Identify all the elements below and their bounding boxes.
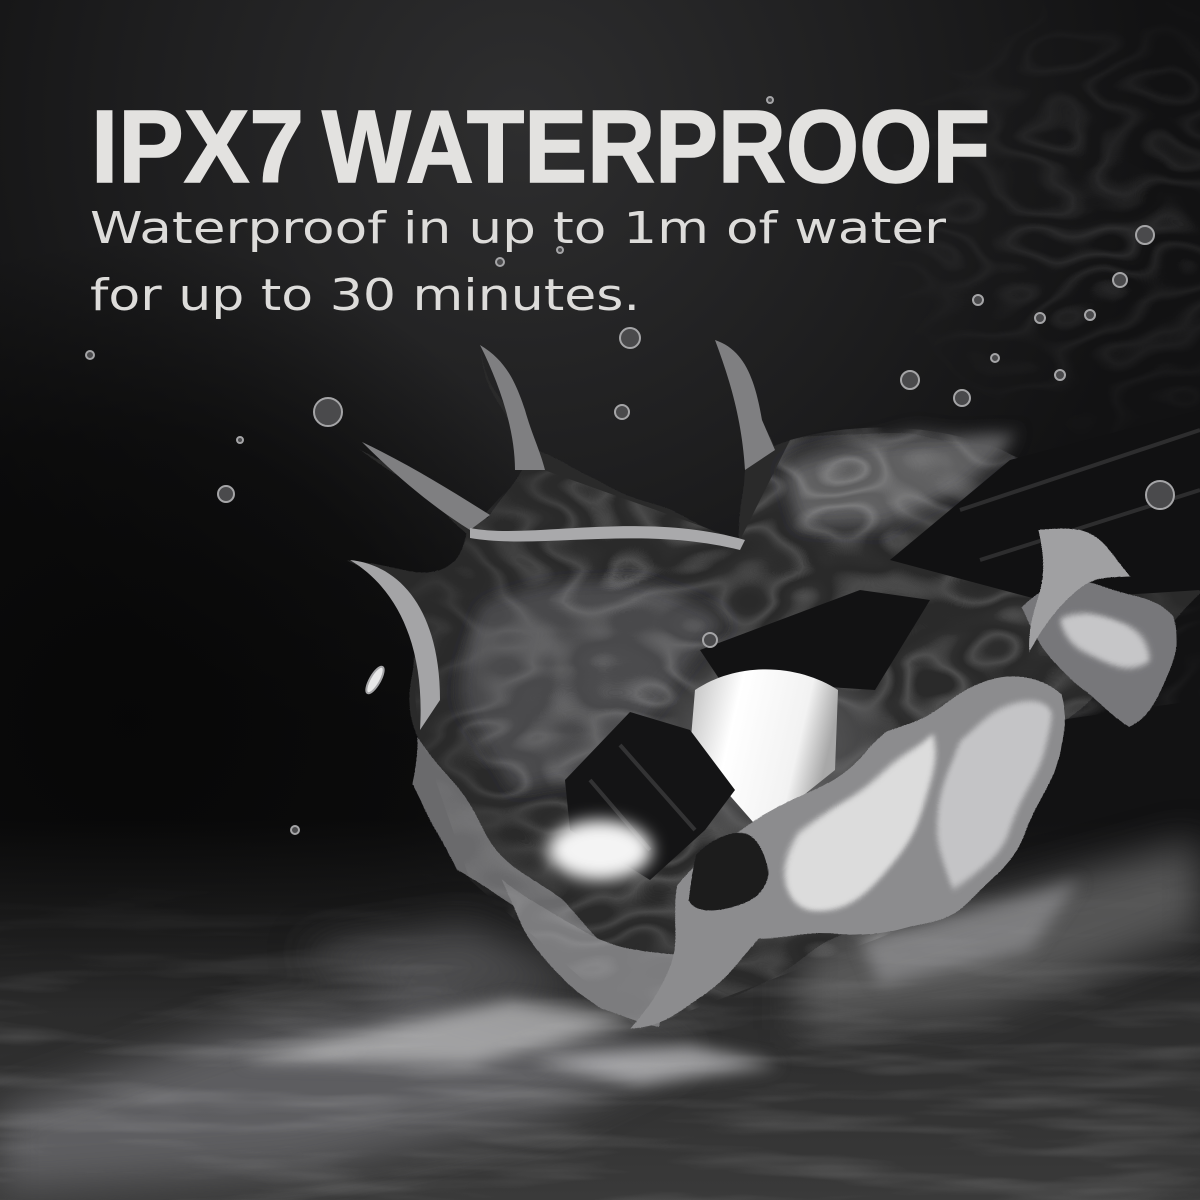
splash spikes and rim highlights	[350, 340, 775, 730]
light streaks on water floor	[0, 826, 1200, 1200]
lantern: upper grip	[700, 590, 930, 690]
front water wave	[630, 530, 1173, 1030]
title: WATERPROOF	[322, 89, 990, 204]
subtitle line 1: Waterproof in up to 1m of water	[90, 203, 947, 254]
title	[91, 89, 990, 204]
water droplets	[86, 97, 1174, 834]
lantern: glowing halo	[660, 655, 880, 835]
lantern	[548, 590, 930, 880]
lantern: lower grip	[565, 712, 735, 880]
subtitle line 2: for up to 30 minutes.	[90, 270, 640, 321]
lantern: white light tube	[690, 669, 838, 830]
lantern: lower light	[548, 820, 652, 880]
dark lantern body behind	[890, 410, 1200, 600]
water splash crown	[347, 340, 1200, 1027]
title: IPX7	[91, 89, 304, 204]
